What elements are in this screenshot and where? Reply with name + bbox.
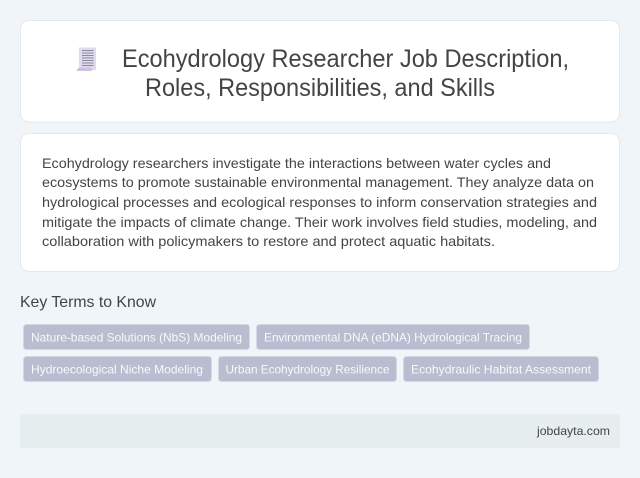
tag: Environmental DNA: Environmental DNA (eDNA) Hydrological Tracing — [264, 330, 522, 344]
tag: Nature-based Solutions: Nature-based Solutions (NbS) Modeling — [31, 330, 242, 344]
description text: collaboration with policymakers to restore and protect aquatic habitats. — [42, 233, 495, 249]
tag: Urban Ecohydrology Resilience — [218, 356, 396, 382]
panel: description card — [20, 134, 620, 272]
description text: mitigate the impacts of climate change. Their work involves field studies, modeling, and — [42, 214, 597, 230]
panel: title card — [20, 20, 620, 122]
tag: Ecohydraulic Habitat Assessment — [404, 356, 598, 382]
description text: ecosystems to promote sustainable environmental management. They analyze data on — [42, 174, 594, 190]
tag: Hydroecological Niche Modeling — [24, 356, 212, 382]
title: Roles, Responsibilities, and Skills — [145, 74, 495, 102]
tag: Nature-based Solutions — [24, 324, 250, 350]
tag: Hydroecological Niche Modeling: Hydroecological Niche Modeling — [31, 362, 203, 376]
description text — [42, 155, 597, 249]
tag list — [24, 324, 598, 382]
title — [122, 45, 569, 102]
footer site name: jobdayta.com — [536, 424, 610, 438]
tag: Urban Ecohydrology Resilience: Urban Ecohydrology Resilience — [226, 362, 390, 376]
title: Ecohydrology Researcher Job Description, — [122, 45, 569, 73]
heading: key terms: Key Terms to Know — [20, 294, 156, 311]
description text: Ecohydrology researchers investigate the interactions between water cycles and — [42, 155, 551, 171]
tag: Environmental DNA — [256, 324, 530, 350]
tag: Ecohydraulic Habitat Assessment: Ecohydraulic Habitat Assessment — [411, 362, 592, 376]
footer bar — [20, 414, 620, 448]
icon: document scroll — [76, 48, 96, 71]
description text: hydrological processes and ecological responses to inform conservation strategies and — [42, 194, 597, 210]
